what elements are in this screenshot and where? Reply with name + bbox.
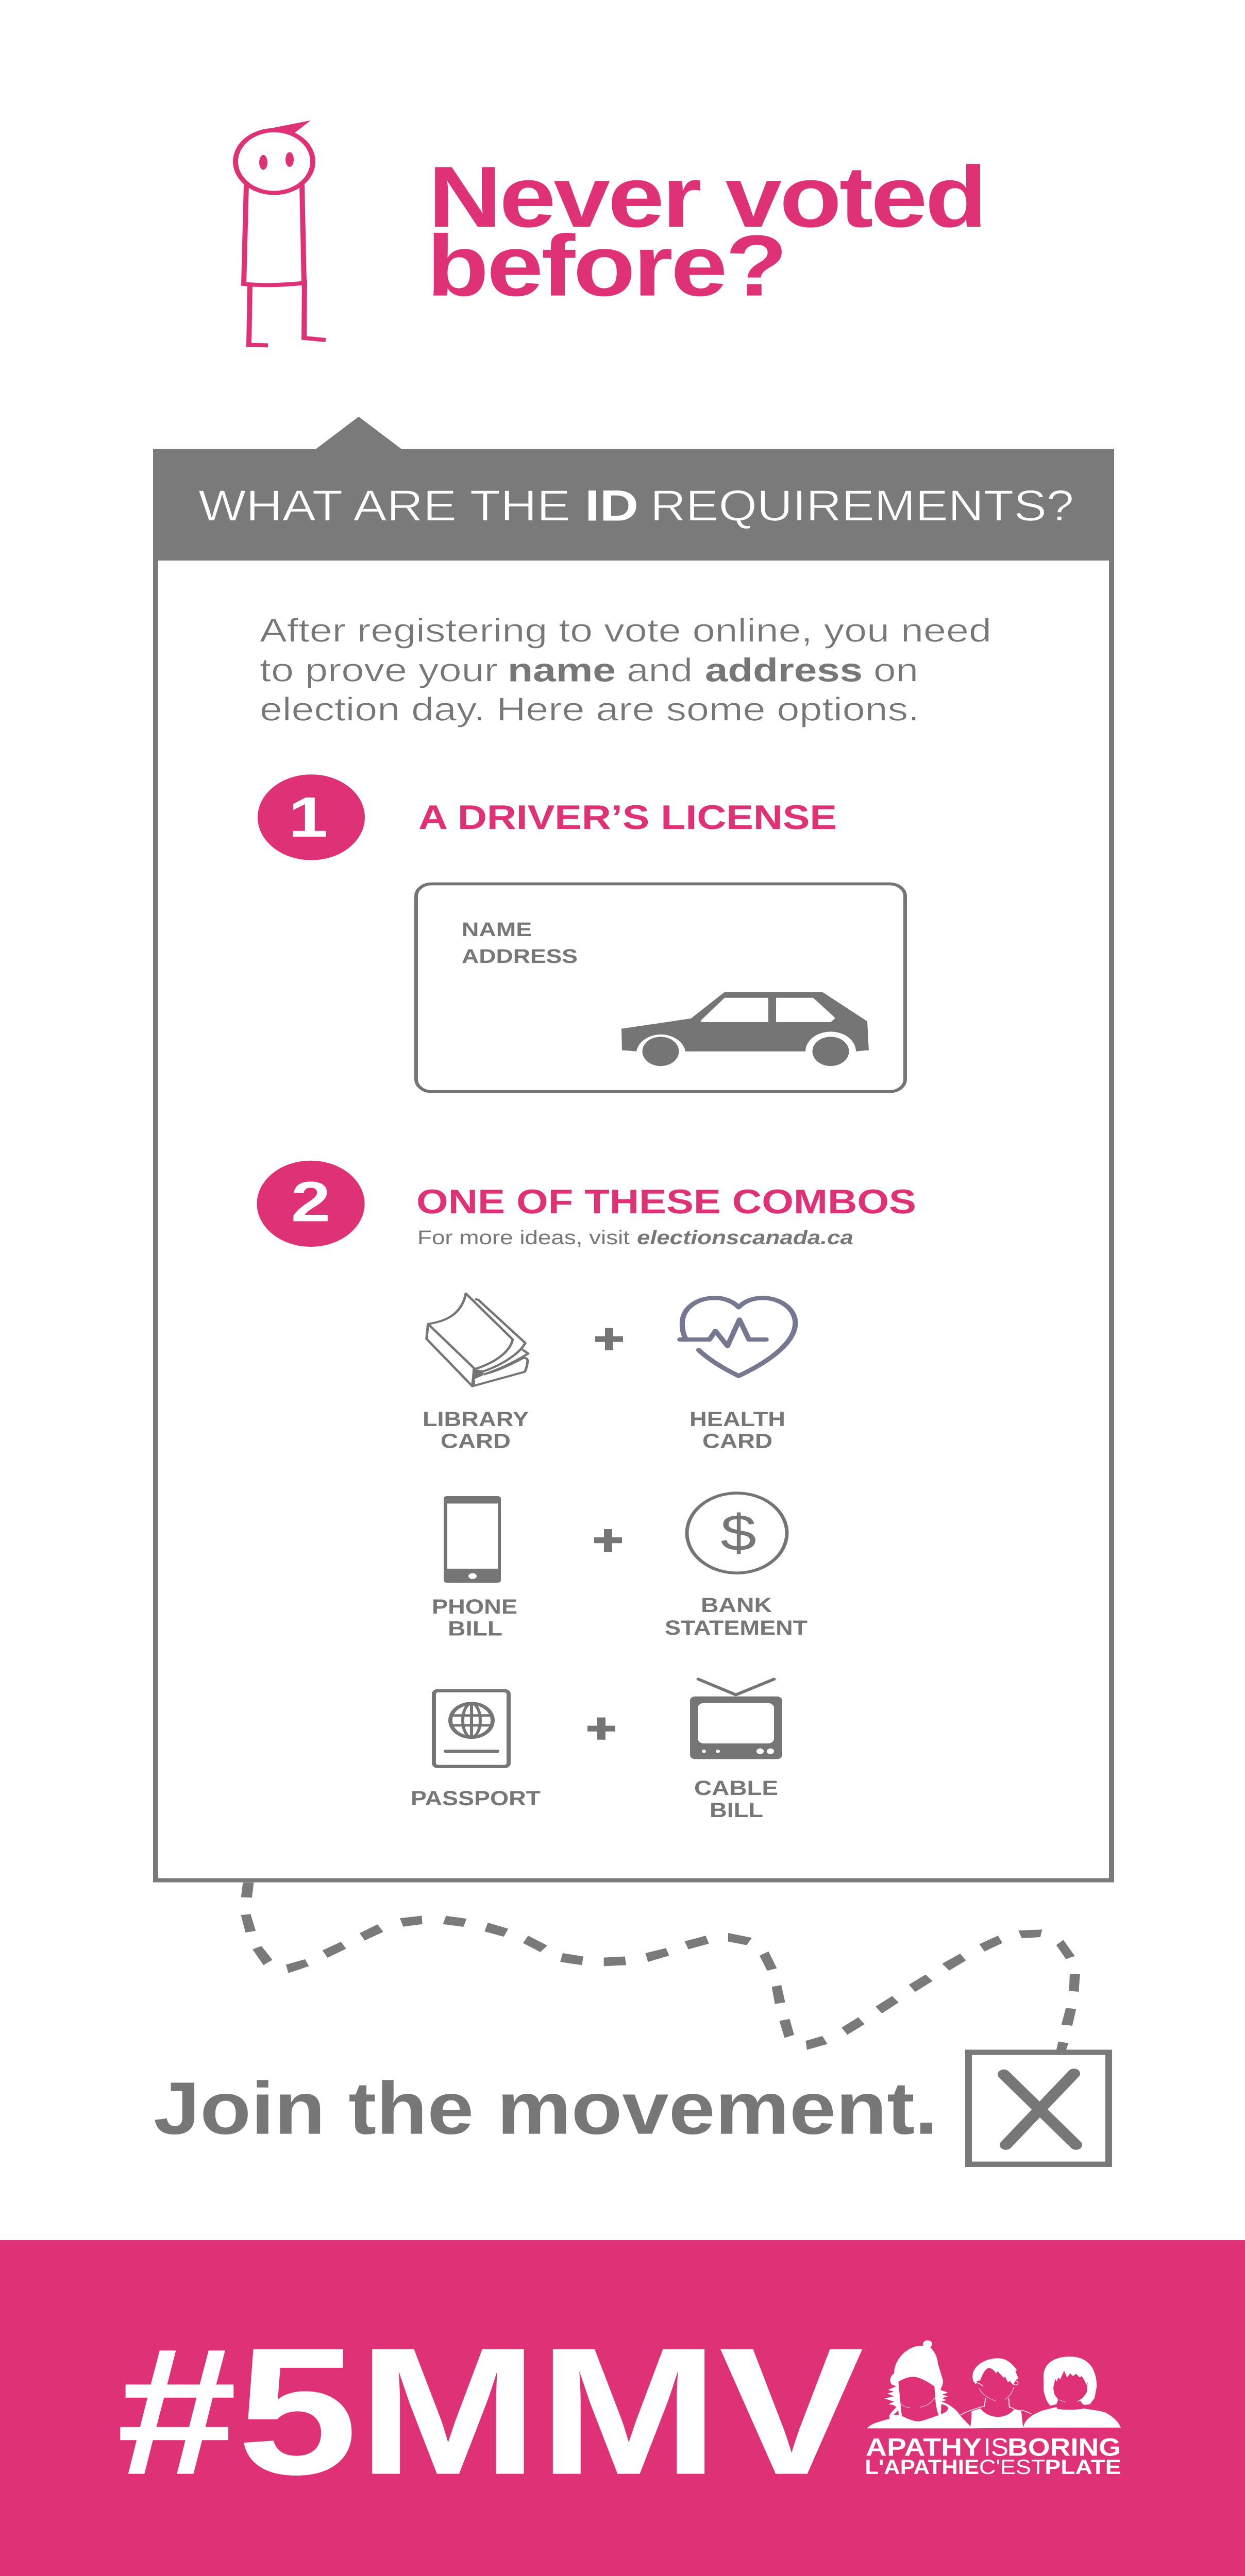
icon: heart bbox=[680, 1298, 795, 1376]
icon: television bbox=[690, 1679, 782, 1759]
icon: passport bbox=[434, 1691, 509, 1767]
intro text: election day. Here are some options. bbox=[260, 691, 919, 727]
intro text bbox=[260, 612, 991, 727]
label: CABLE bbox=[694, 1776, 778, 1800]
driver's license card: ADDRESS bbox=[462, 945, 578, 968]
logo: Apathy is Boring silhouettes bbox=[865, 2341, 1121, 2479]
logo wordmark: C'EST bbox=[979, 2455, 1045, 2479]
logo wordmark: L'APATHIE bbox=[865, 2455, 979, 2479]
logo wordmark: PLATE bbox=[1045, 2455, 1121, 2479]
icon: pink stick figure bbox=[235, 121, 326, 345]
logo wordmark: APATHY bbox=[866, 2433, 982, 2461]
icon: car bbox=[621, 992, 869, 1066]
more ideas note: For more ideas, visit bbox=[417, 1227, 630, 1249]
join the movement: Join the movement. bbox=[154, 2067, 938, 2150]
driver's license card bbox=[416, 884, 905, 1092]
driver's license card: NAME bbox=[462, 919, 532, 941]
campaign hashtag: #5MMV bbox=[116, 2311, 865, 2513]
intro text: and bbox=[627, 652, 693, 688]
combo: library card bbox=[423, 1294, 529, 1452]
label: BANK bbox=[701, 1594, 772, 1617]
combo: passport bbox=[411, 1691, 541, 1810]
label: BILL bbox=[448, 1617, 502, 1640]
person with toque bbox=[867, 2341, 970, 2428]
icon: ballot box with X bbox=[969, 2053, 1109, 2164]
label: PASSPORT bbox=[411, 1787, 541, 1810]
panel frame bbox=[156, 451, 1112, 1880]
step 2 number badge bbox=[257, 1161, 365, 1247]
more ideas note: electionscanada.ca bbox=[637, 1227, 853, 1249]
plus sign bbox=[587, 1718, 615, 1740]
label bbox=[665, 1594, 807, 1639]
plus sign bbox=[595, 1328, 623, 1350]
intro text: on bbox=[873, 652, 918, 688]
pointer triangle bbox=[313, 417, 405, 451]
person with short hair bbox=[960, 2358, 1032, 2428]
step 2 number badge: 2 bbox=[291, 1170, 330, 1233]
intro text: After registering to vote online, you need bbox=[260, 612, 991, 649]
label bbox=[689, 1408, 785, 1452]
panel heading bbox=[198, 481, 1074, 530]
step 1 number badge: 1 bbox=[289, 786, 328, 849]
icon: dollar coin bbox=[687, 1493, 787, 1573]
combo: bank statement bbox=[665, 1493, 807, 1639]
dashed path to ballot box bbox=[241, 1883, 1080, 2050]
label: LIBRARY bbox=[423, 1408, 529, 1431]
panel heading: WHAT ARE THE bbox=[198, 481, 570, 530]
more ideas note bbox=[417, 1227, 853, 1249]
step 1 heading: A DRIVER’S LICENSE bbox=[418, 798, 837, 836]
footer band bbox=[0, 2240, 1245, 2576]
combo: health card bbox=[680, 1298, 795, 1452]
title: before? bbox=[427, 217, 787, 314]
icon: dollar coin: $ bbox=[720, 1504, 756, 1562]
label: HEALTH bbox=[689, 1408, 785, 1431]
icon: book bbox=[427, 1294, 528, 1386]
logo wordmark: IS bbox=[984, 2433, 1008, 2461]
label: CARD bbox=[702, 1429, 772, 1452]
intro text: to prove your bbox=[260, 652, 498, 688]
label: STATEMENT bbox=[665, 1616, 807, 1639]
person with bob haircut bbox=[1023, 2357, 1121, 2428]
label: CARD bbox=[441, 1429, 511, 1452]
combo: cable bill bbox=[690, 1679, 782, 1822]
label: PHONE bbox=[432, 1595, 517, 1618]
plus sign bbox=[594, 1529, 622, 1552]
logo wordmark: BORING bbox=[1007, 2433, 1121, 2461]
panel: ID requirements bbox=[153, 417, 1114, 1880]
title bbox=[427, 148, 987, 314]
panel heading: ID bbox=[585, 481, 638, 530]
combo: phone bill bbox=[432, 1496, 517, 1640]
step 2 heading: ONE OF THESE COMBOS bbox=[416, 1182, 916, 1221]
step 1 number badge bbox=[258, 774, 365, 860]
icon: phone bbox=[444, 1496, 501, 1583]
logo wordmark bbox=[865, 2433, 1121, 2479]
label bbox=[694, 1776, 778, 1822]
intro text: name bbox=[508, 652, 616, 688]
header band bbox=[153, 451, 1114, 561]
intro text: address bbox=[705, 652, 863, 688]
label bbox=[423, 1408, 529, 1452]
panel heading: REQUIREMENTS? bbox=[650, 481, 1074, 530]
label bbox=[432, 1595, 517, 1640]
title: Never voted bbox=[428, 148, 987, 245]
label: BILL bbox=[710, 1799, 763, 1822]
